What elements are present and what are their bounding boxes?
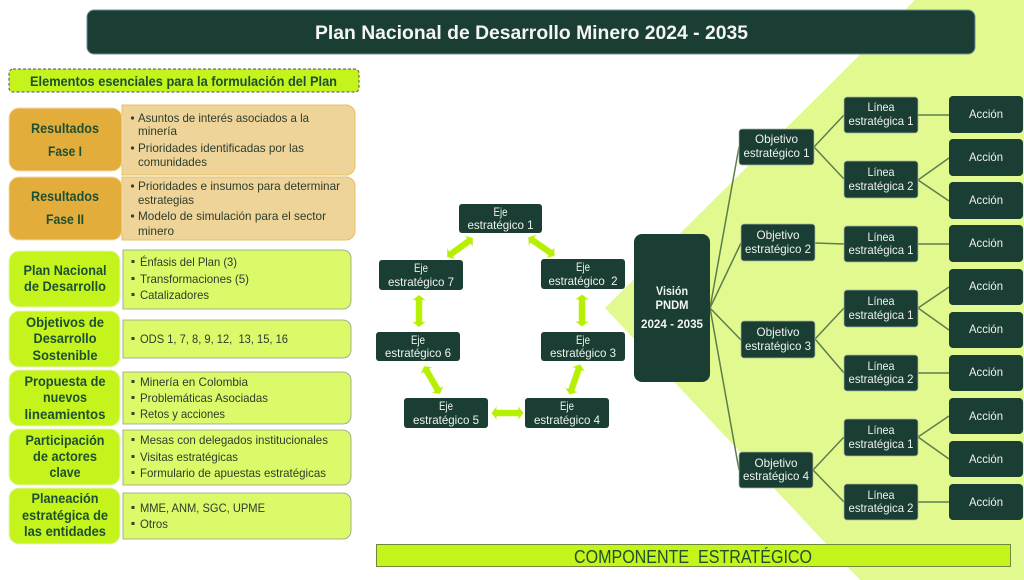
panel: left column of plan inputs — [9, 105, 355, 544]
linea 1 of objetivo 2 — [844, 226, 918, 262]
arrow: eje 2 to eje 3 — [576, 294, 588, 326]
eje 3: Eje — [576, 333, 590, 347]
row: Propuesta de nuevos lineamientos — [9, 370, 351, 426]
objetivo 4 — [739, 452, 813, 488]
objetivo 4: estratégico 4 — [743, 469, 809, 483]
arrow: eje 5 to eje 4 — [492, 406, 524, 420]
row: Participación de actores clave: Visitas estratégicas — [140, 450, 238, 464]
row: Participación de actores clave: de actores — [33, 449, 97, 464]
row: Participación de actores clave — [9, 429, 351, 485]
accion 9 — [949, 441, 1023, 477]
row: Plan Nacional de Desarrollo: Plan Nacional — [24, 263, 106, 278]
accion 5 — [949, 269, 1023, 305]
linea 2 of objetivo 4: Línea — [868, 488, 895, 502]
row: Participación de actores clave: clave — [50, 465, 81, 480]
linea 2 of objetivo 4: estratégica 2 — [848, 501, 914, 515]
eje 4 — [525, 398, 609, 428]
row: Objetivos de Desarrollo Sostenible — [9, 311, 351, 367]
row: Plan Nacional de Desarrollo: Transformaciones (5) — [140, 272, 249, 286]
title: Plan Nacional de Desarrollo Minero 2024 - 2035 — [315, 22, 748, 44]
objetivo 4: Objetivo — [754, 456, 798, 470]
vision box: PNDM — [656, 298, 688, 312]
linea 2 of objetivo 3: Línea — [868, 359, 895, 373]
row: Planeación estratégica de las entidades: las entidades — [24, 524, 106, 539]
row: Propuesta de nuevos lineamientos: Problemáticas Asociadas — [140, 391, 268, 405]
tree: actions — [949, 96, 1023, 520]
row: Resultados Fase II: minero — [138, 224, 174, 238]
accion 4 — [949, 225, 1023, 262]
arrow: eje 3 to eje 4 — [564, 362, 586, 397]
eje 2 — [541, 259, 625, 289]
row: Objetivos de Desarrollo Sostenible: Objetivos de — [26, 315, 104, 330]
linea 2 of objetivo 1 — [844, 161, 918, 198]
accion 1: Acción — [969, 107, 1003, 121]
row: Resultados Fase II — [9, 177, 355, 240]
accion 7 — [949, 355, 1023, 391]
objetivo 3: Objetivo — [756, 325, 800, 339]
row: Resultados Fase I: Fase I — [48, 144, 82, 159]
arrow: eje 1 to eje 7 — [443, 233, 477, 262]
accion 6: Acción — [969, 322, 1003, 336]
objetivo 2 — [741, 224, 815, 261]
accion 2 — [949, 139, 1023, 176]
linea 2 of objetivo 1: estratégica 2 — [848, 179, 914, 193]
tree: objectives — [739, 129, 815, 488]
row: Planeación estratégica de las entidades: MME, ANM, SGC, UPME — [140, 501, 265, 515]
row: Planeación estratégica de las entidades — [9, 488, 351, 544]
background: light green strategic component area — [605, 0, 1024, 580]
arrow: eje 7 to eje 6 — [412, 295, 426, 327]
eje 5: estratégico 5 — [413, 413, 479, 427]
row: Resultados Fase I — [9, 105, 355, 175]
row: Propuesta de nuevos lineamientos: Retos y acciones — [140, 407, 225, 421]
linea 2 of objetivo 3: estratégica 2 — [848, 372, 914, 386]
row: Propuesta de nuevos lineamientos: Propuesta de — [24, 374, 106, 389]
linea 1 of objetivo 3: Línea — [868, 294, 895, 308]
row: Propuesta de nuevos lineamientos: lineamientos — [24, 407, 106, 422]
row: Participación de actores clave: Mesas con delegados institucionales — [140, 433, 328, 447]
row: Resultados Fase II: Modelo de simulación para el sector — [138, 209, 326, 223]
eje 1: Eje — [494, 205, 508, 219]
heading: essential elements: Elementos esenciales para la formulación del Plan — [30, 73, 337, 89]
arrow: eje 1 to eje 2 — [525, 232, 558, 261]
linea 1 of objetivo 2: Línea — [868, 230, 895, 244]
objetivo 2: estratégico 2 — [745, 242, 811, 256]
linea 1 of objetivo 4 — [844, 419, 918, 456]
connectors: vision to objectives, lines and actions — [710, 115, 949, 502]
eje 1: estratégico 1 — [468, 218, 534, 232]
title — [87, 10, 975, 54]
vision box: 2024 - 2035 — [641, 317, 703, 331]
row: Objetivos de Desarrollo Sostenible: Desarrollo — [34, 331, 96, 346]
accion 1 — [949, 96, 1023, 133]
row: Participación de actores clave: Formulario de apuestas estratégicas — [140, 466, 326, 480]
row: Resultados Fase I: Asuntos de interés asociados a la — [138, 111, 309, 125]
eje 6: estratégico 6 — [385, 346, 451, 360]
row: Resultados Fase II: Fase II — [46, 212, 84, 227]
row: Resultados Fase I: minería — [138, 124, 177, 138]
accion 3: Acción — [969, 193, 1003, 207]
accion 10: Acción — [969, 495, 1003, 509]
accion 5: Acción — [969, 279, 1003, 293]
accion 3 — [949, 182, 1023, 219]
accion 2: Acción — [969, 150, 1003, 164]
eje 6: Eje — [411, 333, 425, 347]
eje 7: estratégico 7 — [388, 275, 454, 289]
objetivo 3: estratégico 3 — [745, 339, 811, 353]
linea 1 of objetivo 3: estratégica 1 — [848, 308, 914, 322]
eje 1 — [459, 204, 542, 233]
row: Objetivos de Desarrollo Sostenible: Sostenible — [32, 348, 98, 363]
row: Resultados Fase II: estrategias — [138, 193, 194, 207]
row: Plan Nacional de Desarrollo: Catalizadores — [140, 288, 209, 302]
accion 9: Acción — [969, 452, 1003, 466]
eje 2: estratégico 2 — [548, 274, 618, 288]
vision box: Visión — [656, 284, 688, 298]
eje 5 — [404, 398, 488, 428]
row: Planeación estratégica de las entidades: Planeación — [32, 491, 98, 506]
accion 8: Acción — [969, 409, 1003, 423]
arrow: eje 6 to eje 5 — [418, 363, 446, 397]
linea 1 of objetivo 2: estratégica 1 — [848, 243, 914, 257]
linea 2 of objetivo 1: Línea — [868, 165, 895, 179]
row: Resultados Fase I: Prioridades identificadas por las — [138, 141, 304, 155]
eje 4: estratégico 4 — [534, 413, 600, 427]
linea 2 of objetivo 3 — [844, 355, 918, 391]
banner: componente estratégico — [376, 544, 1010, 567]
row: Planeación estratégica de las entidades: estratégica de — [22, 508, 108, 523]
objetivo 1: estratégico 1 — [744, 146, 810, 160]
accion 6 — [949, 312, 1023, 348]
row: Resultados Fase I: Resultados — [31, 121, 99, 136]
accion 8 — [949, 398, 1023, 434]
row: Plan Nacional de Desarrollo — [9, 250, 351, 309]
row: Plan Nacional de Desarrollo: de Desarrollo — [24, 279, 106, 294]
row: Propuesta de nuevos lineamientos: Minería en Colombia — [140, 375, 248, 389]
eje 3: estratégico 3 — [550, 346, 616, 360]
eje 2: Eje — [576, 260, 590, 274]
row: Objetivos de Desarrollo Sostenible: ODS 1, 7, 8, 9, 12, 13, 15, 16 — [140, 332, 288, 346]
linea 1 of objetivo 4: estratégica 1 — [848, 437, 914, 451]
row: Planeación estratégica de las entidades: Otros — [140, 517, 168, 531]
objetivo 2: Objetivo — [756, 228, 800, 242]
linea 1 of objetivo 3 — [844, 290, 918, 327]
row: Resultados Fase II: Resultados — [31, 189, 99, 204]
row: Resultados Fase I: comunidades — [138, 155, 207, 169]
tree: strategic lines — [844, 97, 918, 520]
linea 1 of objetivo 1: estratégica 1 — [848, 114, 914, 128]
objetivo 1 — [739, 129, 814, 165]
accion 10 — [949, 484, 1023, 520]
eje 6 — [376, 332, 460, 361]
linea 2 of objetivo 4 — [844, 484, 918, 520]
linea 1 of objetivo 4: Línea — [868, 423, 895, 437]
linea 1 of objetivo 1: Línea — [868, 100, 895, 114]
eje 7: Eje — [414, 261, 428, 275]
objetivo 1: Objetivo — [755, 132, 798, 146]
row: Plan Nacional de Desarrollo: Énfasis del Plan (3) — [140, 254, 237, 269]
accion 4: Acción — [969, 236, 1003, 250]
row: Participación de actores clave: Participación — [26, 433, 104, 448]
accion 7: Acción — [969, 365, 1003, 379]
eje 4: Eje — [560, 399, 574, 413]
row: Propuesta de nuevos lineamientos: nuevos — [43, 390, 87, 405]
banner: componente estratégico: COMPONENTE ESTRATÉGICO — [574, 547, 812, 567]
heading: essential elements — [9, 69, 359, 92]
eje 7 — [379, 260, 463, 290]
linea 1 of objetivo 1 — [844, 97, 918, 133]
eje 3 — [541, 332, 625, 361]
vision box — [634, 234, 710, 382]
diagram: cycle of strategic axes — [376, 204, 625, 428]
eje 5: Eje — [439, 399, 453, 413]
objetivo 3 — [741, 321, 815, 358]
row: Resultados Fase II: Prioridades e insumos para determinar — [138, 179, 340, 193]
